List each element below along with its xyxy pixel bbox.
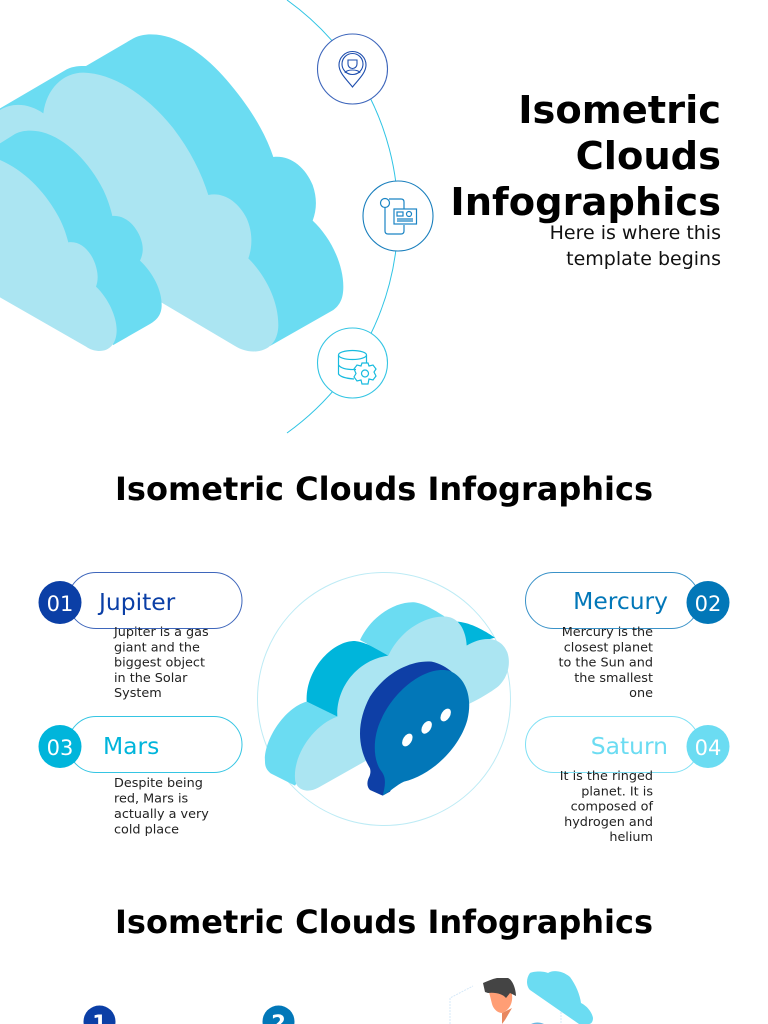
big cloud side: [0, 34, 343, 346]
item: Mercury: Mercury: [573, 587, 668, 615]
cloud front face: [295, 617, 509, 791]
cloud back left lobe: [265, 702, 337, 786]
cloud back middle lobe: [307, 641, 388, 717]
item: Mercury: 02: [695, 592, 721, 616]
item: Mercury: the smallest: [574, 671, 653, 686]
item: Jupiter: giant and the: [114, 640, 200, 656]
person with cloud illustration: [450, 971, 593, 1024]
item: Mars: red, Mars is: [114, 792, 189, 806]
item: Mars: 03: [47, 736, 73, 760]
small cloud front face: [0, 160, 117, 351]
item: Mars: actually a very: [114, 807, 209, 822]
small cloud: [527, 971, 593, 1024]
item: Jupiter: System: [114, 686, 162, 701]
item: Jupiter: [38, 572, 242, 701]
item: Mars: Mars: [103, 732, 159, 760]
step badge 1: [84, 1006, 116, 1024]
item: Saturn: planet. It is: [581, 784, 653, 800]
cloud back top lobe: [360, 602, 450, 656]
item: Jupiter: 01: [47, 592, 73, 616]
item: Mars: [38, 716, 242, 838]
item: Mercury: Mercury is the: [562, 625, 653, 640]
subtitle: template begins: [566, 248, 721, 270]
item: Jupiter: Jupiter is a gas: [113, 625, 209, 640]
icon node: phone and card: [363, 181, 433, 251]
item: Mercury: one: [629, 686, 653, 701]
item: Saturn: It is the ringed: [560, 769, 653, 784]
connecting arc: [287, 0, 398, 433]
item: Mercury: to the Sun and: [559, 656, 653, 670]
central cloud with speech bubble: [265, 602, 509, 796]
step badge 2: [262, 1006, 294, 1024]
item: Jupiter: biggest object: [114, 656, 205, 670]
hexagon outline: [450, 986, 561, 1024]
small cloud side: [0, 131, 162, 345]
main title: Infographics: [450, 180, 721, 225]
item: Mercury: [526, 572, 730, 701]
item: Saturn: [526, 716, 730, 845]
person hair: [483, 978, 516, 998]
speech bubble: [360, 662, 469, 796]
isometric clouds illustration: [0, 34, 343, 351]
main title: [450, 88, 721, 225]
central circle: [258, 572, 510, 826]
icon node: location pin: [318, 34, 388, 104]
item: Saturn: 04: [695, 736, 721, 760]
item: Jupiter: in the Solar: [114, 671, 188, 686]
item: Saturn: Saturn: [591, 732, 668, 760]
cloud back right lobe: [457, 622, 495, 646]
item: Mars: Despite being: [114, 776, 203, 791]
main title: Clouds: [576, 134, 721, 179]
section heading 2: Isometric Clouds Infographics: [115, 470, 653, 508]
big cloud front face: [0, 73, 278, 351]
icon node: database and gear: [318, 328, 388, 398]
person neck: [502, 1008, 512, 1024]
item: Saturn: helium: [609, 830, 653, 845]
shirt accent: [531, 1022, 544, 1024]
main title: Isometric: [518, 88, 721, 133]
item: Saturn: hydrogen and: [564, 815, 653, 830]
item: Mercury: closest planet: [564, 640, 653, 656]
subtitle: Here is where this: [550, 222, 721, 244]
item: Mars: cold place: [114, 822, 179, 838]
item: Jupiter: Jupiter: [97, 588, 176, 616]
item: Saturn: composed of: [571, 800, 653, 814]
section heading 3: Isometric Clouds Infographics: [115, 903, 653, 941]
person face: [488, 988, 512, 1013]
subtitle: [550, 222, 721, 270]
